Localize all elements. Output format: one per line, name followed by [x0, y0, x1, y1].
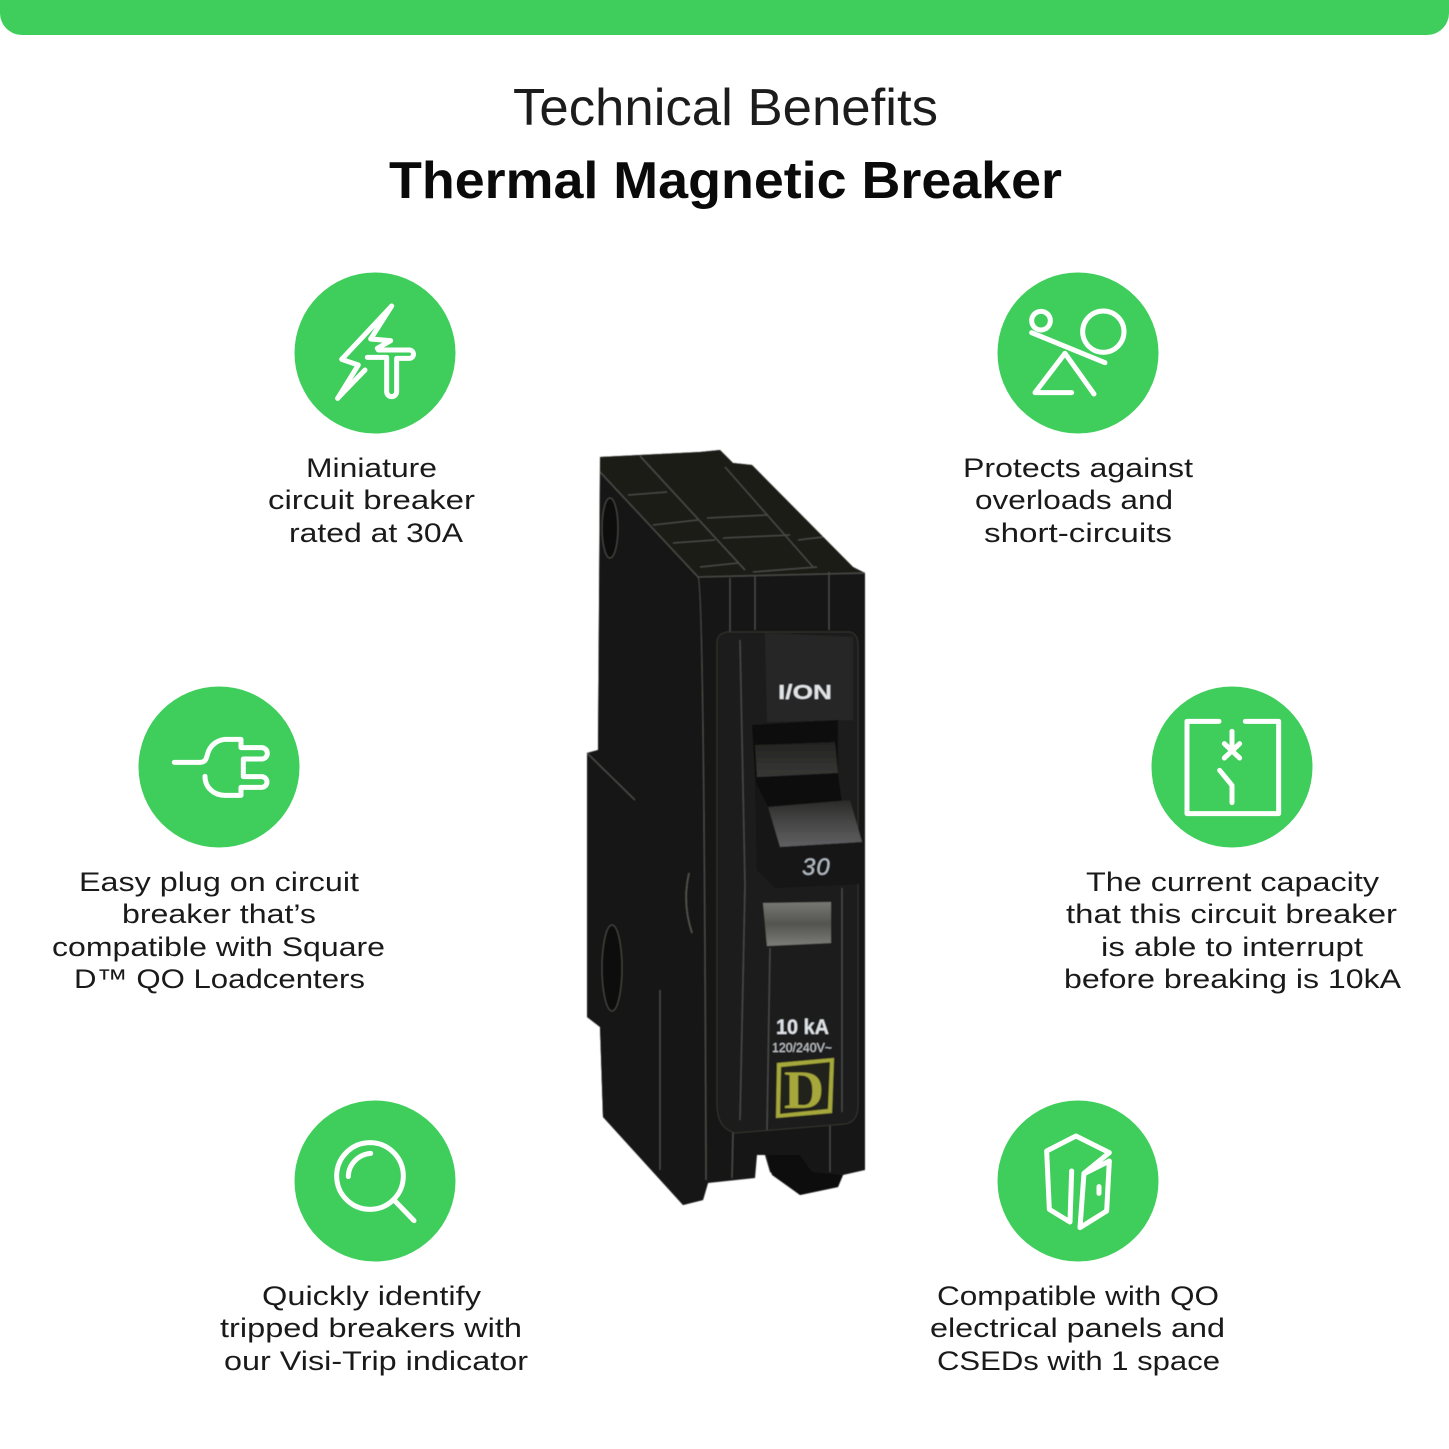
text: visi-trip: Quickly identify [262, 1281, 482, 1311]
icon: lightning bolt and T [294, 272, 456, 434]
panel: visi-trip [220, 1100, 528, 1376]
panel: current capacity [1064, 686, 1401, 994]
text: protects: overloads and [975, 485, 1173, 515]
text: current capacity [1064, 867, 1401, 994]
bottom clip [767, 1155, 843, 1195]
text: compatible: electrical panels and [930, 1313, 1225, 1343]
icon: plug [138, 686, 300, 848]
text: protects [963, 453, 1194, 548]
text: compatible: CSEDs with 1 space [937, 1346, 1220, 1376]
panel: overload protection [963, 272, 1194, 548]
text: current capacity: The current capacity [1086, 867, 1380, 897]
rating panel [755, 780, 862, 888]
top face [600, 450, 865, 577]
panel inner lines [740, 640, 842, 1130]
text: easy plug: D™ QO Loadcenters [74, 964, 365, 994]
handle side [755, 773, 842, 870]
text: easy plug: Easy plug on circuit [79, 867, 360, 897]
text: current capacity: is able to interrupt [1101, 932, 1364, 962]
panel: compatibility [930, 1100, 1225, 1376]
text: miniature: Miniature [306, 453, 437, 483]
handle recess [752, 720, 838, 790]
product image: circuit breaker [587, 450, 865, 1205]
on label: I/ON [778, 682, 832, 704]
panel: easy plug on [52, 686, 385, 994]
handle lower [768, 800, 862, 847]
text: miniature: rated at 30A [289, 518, 463, 548]
text: current capacity: that this circuit breaker [1066, 899, 1397, 929]
panel: miniature circuit breaker [268, 272, 475, 548]
voltage: 120/240V~ [772, 1040, 832, 1055]
icon: magnifier [294, 1100, 456, 1262]
trip window [763, 902, 831, 946]
handle upper [755, 742, 838, 777]
front raised panel [717, 632, 858, 1133]
text: compatible [930, 1281, 1225, 1376]
text: easy plug: compatible with Square [52, 932, 385, 962]
interrupt rating: 10 kA [776, 1016, 829, 1039]
mounting holes [602, 498, 622, 1011]
text: protects: short-circuits [984, 518, 1172, 548]
text: miniature: circuit breaker [268, 485, 475, 515]
title [389, 79, 1062, 210]
title: Technical Benefits [513, 79, 938, 137]
text: current capacity: before breaking is 10kA [1064, 964, 1401, 994]
text: visi-trip: tripped breakers with [220, 1313, 522, 1343]
square d logo [776, 1058, 834, 1120]
side arc [686, 873, 692, 933]
side face shading [587, 472, 708, 1205]
body edge lines [587, 456, 865, 1180]
text: compatible: Compatible with QO [937, 1281, 1219, 1311]
top green bar [0, 0, 1449, 35]
breaker body silhouette [587, 450, 865, 1205]
square d logo: D [784, 1060, 824, 1120]
text: easy plug: breaker that’s [122, 899, 316, 929]
title: Thermal Magnetic Breaker [389, 152, 1062, 210]
icon: door [998, 1100, 1158, 1262]
rocker top [765, 633, 853, 722]
icon: seesaw [998, 272, 1158, 434]
text: protects: Protects against [963, 453, 1194, 483]
text: visi-trip: our Visi-Trip indicator [224, 1346, 528, 1376]
icon: switch diagram [1152, 686, 1312, 848]
text: miniature [268, 453, 475, 548]
text: easy plug [52, 867, 385, 994]
text: visi-trip [220, 1281, 528, 1376]
rating number: 30 [802, 854, 831, 881]
